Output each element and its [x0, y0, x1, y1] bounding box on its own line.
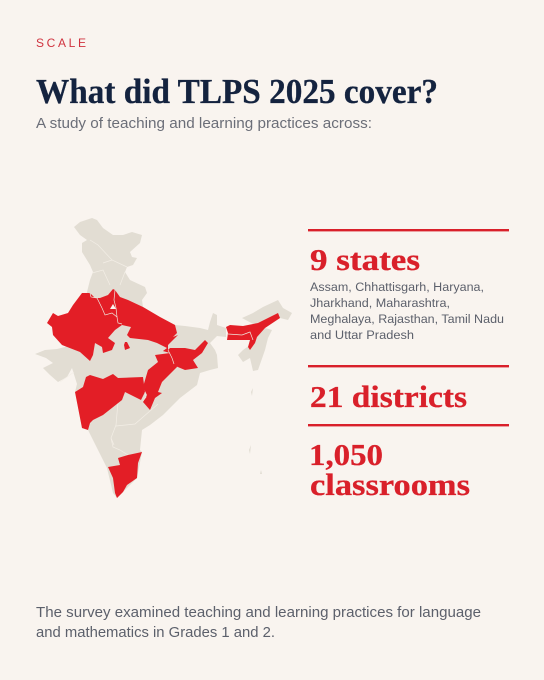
stat: 1,050 classrooms: 1,050: [309, 437, 383, 472]
state: Rajasthan, Haryana, Uttar Pradesh: [47, 289, 178, 361]
footer note: The survey examined teaching and learning practices for language: [36, 605, 481, 621]
stat: 1,050 classrooms: classrooms: [310, 467, 470, 502]
map: red states: [47, 289, 280, 498]
state: Maharashtra: [75, 374, 145, 430]
map of India: [35, 218, 292, 498]
footer note: and mathematics in Grades 1 and 2.: [36, 625, 275, 641]
stats column: [308, 229, 509, 502]
subtitle: A study of teaching and learning practices across:: [36, 115, 372, 132]
state: Jharkhand: [163, 340, 208, 370]
divider rule: [308, 365, 509, 367]
stat: 1,050 classrooms: [309, 437, 470, 502]
eyebrow label: SCALE: [36, 36, 86, 50]
divider rule: [308, 229, 509, 231]
footer note: [36, 605, 481, 641]
state: Uttar Pradesh southern lobe: [124, 342, 130, 350]
state: Chhattisgarh: [143, 353, 177, 410]
state: Assam and Meghalaya: [226, 313, 280, 350]
list of states: Assam, Chhattisgarh, Haryana,: [310, 280, 484, 294]
list of states: Jharkhand, Maharashtra,: [310, 296, 450, 310]
stat: 21 districts: 21 districts: [310, 379, 467, 414]
divider rule: [308, 424, 509, 426]
stat: 9 states: 9 states: [310, 242, 420, 277]
list of states: [310, 280, 504, 342]
list of states: Meghalaya, Rajasthan, Tamil Nadu: [310, 312, 504, 326]
map: grey base states: [35, 218, 292, 498]
title: What did TLPS 2025 cover?: [36, 72, 438, 111]
list of states: and Uttar Pradesh: [310, 328, 414, 342]
state: Tamil Nadu: [108, 452, 142, 498]
